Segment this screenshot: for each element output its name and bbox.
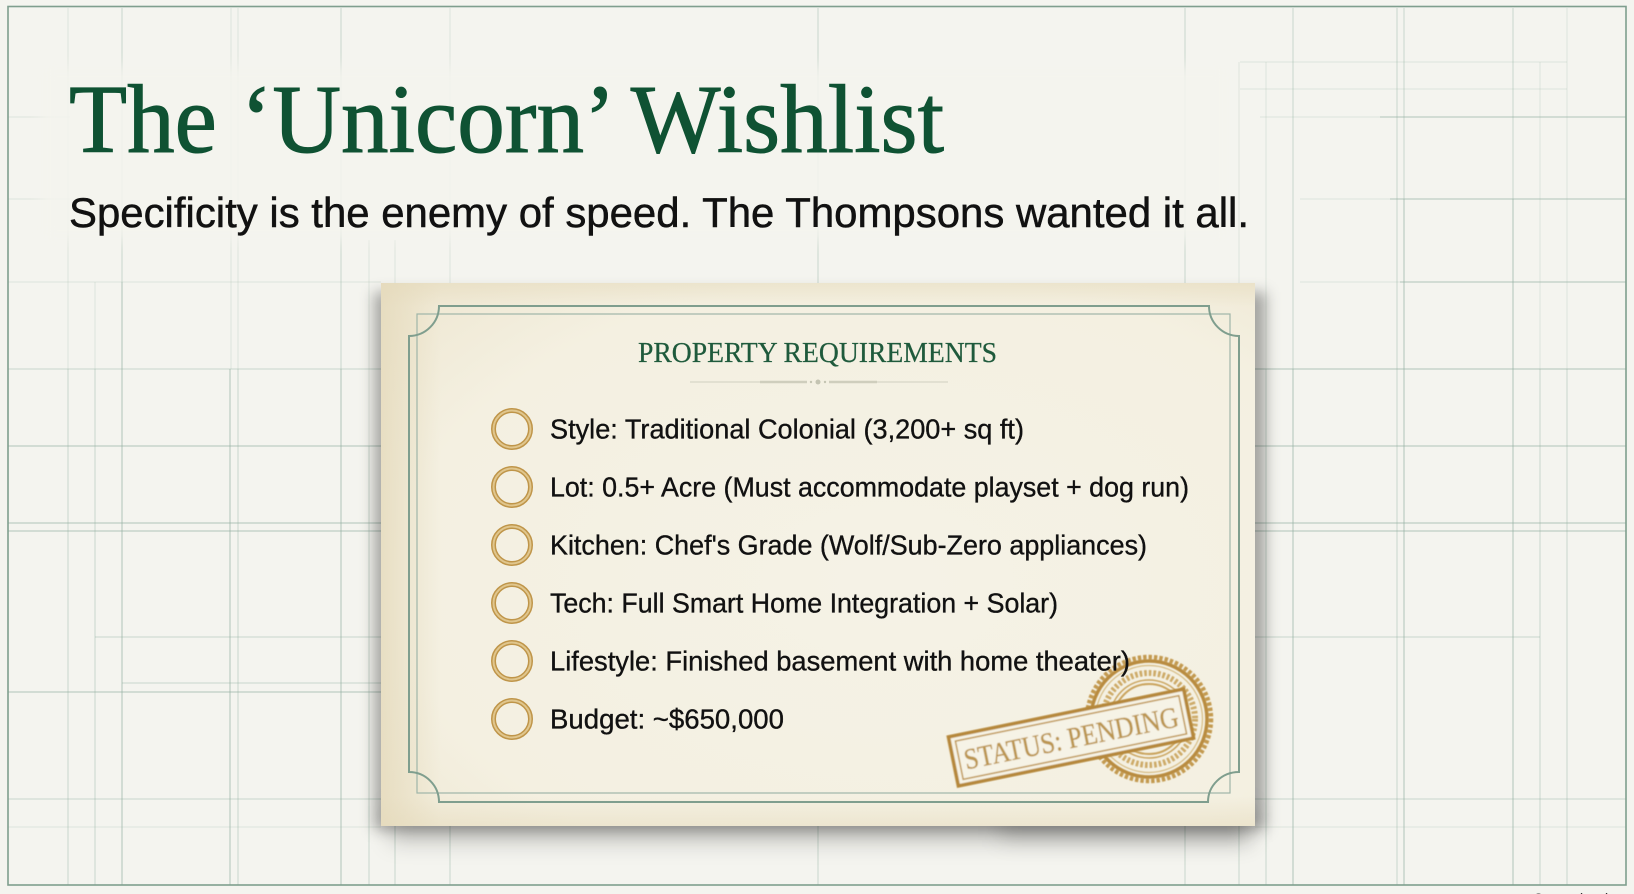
subtitle: Specificity is the enemy of speed. The Thompsons wanted it all. bbox=[69, 189, 1249, 236]
card shadow bbox=[374, 292, 1266, 842]
item: kitchen: Kitchen: Chef's Grade (Wolf/Sub-Zero appliances) bbox=[550, 530, 1147, 560]
item: style: Style: Traditional Colonial (3,200+ sq ft) bbox=[550, 414, 1024, 444]
gold seal bbox=[1087, 657, 1211, 781]
item: lifestyle: Lifestyle: Finished basement with home theater) bbox=[550, 646, 1130, 676]
heading divider ornament bbox=[690, 380, 948, 384]
title: The ‘Unicorn’ Wishlist bbox=[69, 66, 944, 173]
fade behind heading bbox=[40, 66, 1230, 241]
status pending stamp: STATUS: PENDING bbox=[961, 701, 1181, 776]
card heading: PROPERTY REQUIREMENTS bbox=[638, 337, 997, 369]
item: tech: Tech: Full Smart Home Integration + Solar) bbox=[550, 588, 1058, 618]
card paper bbox=[381, 283, 1255, 826]
panel: property requirements card bbox=[374, 283, 1266, 842]
item: budget: Budget: ~$650,000 bbox=[550, 704, 784, 734]
item: budget bbox=[494, 700, 784, 738]
card ornamental border bbox=[409, 306, 1239, 802]
item: lot: Lot: 0.5+ Acre (Must accommodate playset + dog run) bbox=[550, 472, 1189, 502]
paper ageing tones bbox=[381, 283, 1255, 826]
checklist bbox=[494, 410, 1189, 738]
